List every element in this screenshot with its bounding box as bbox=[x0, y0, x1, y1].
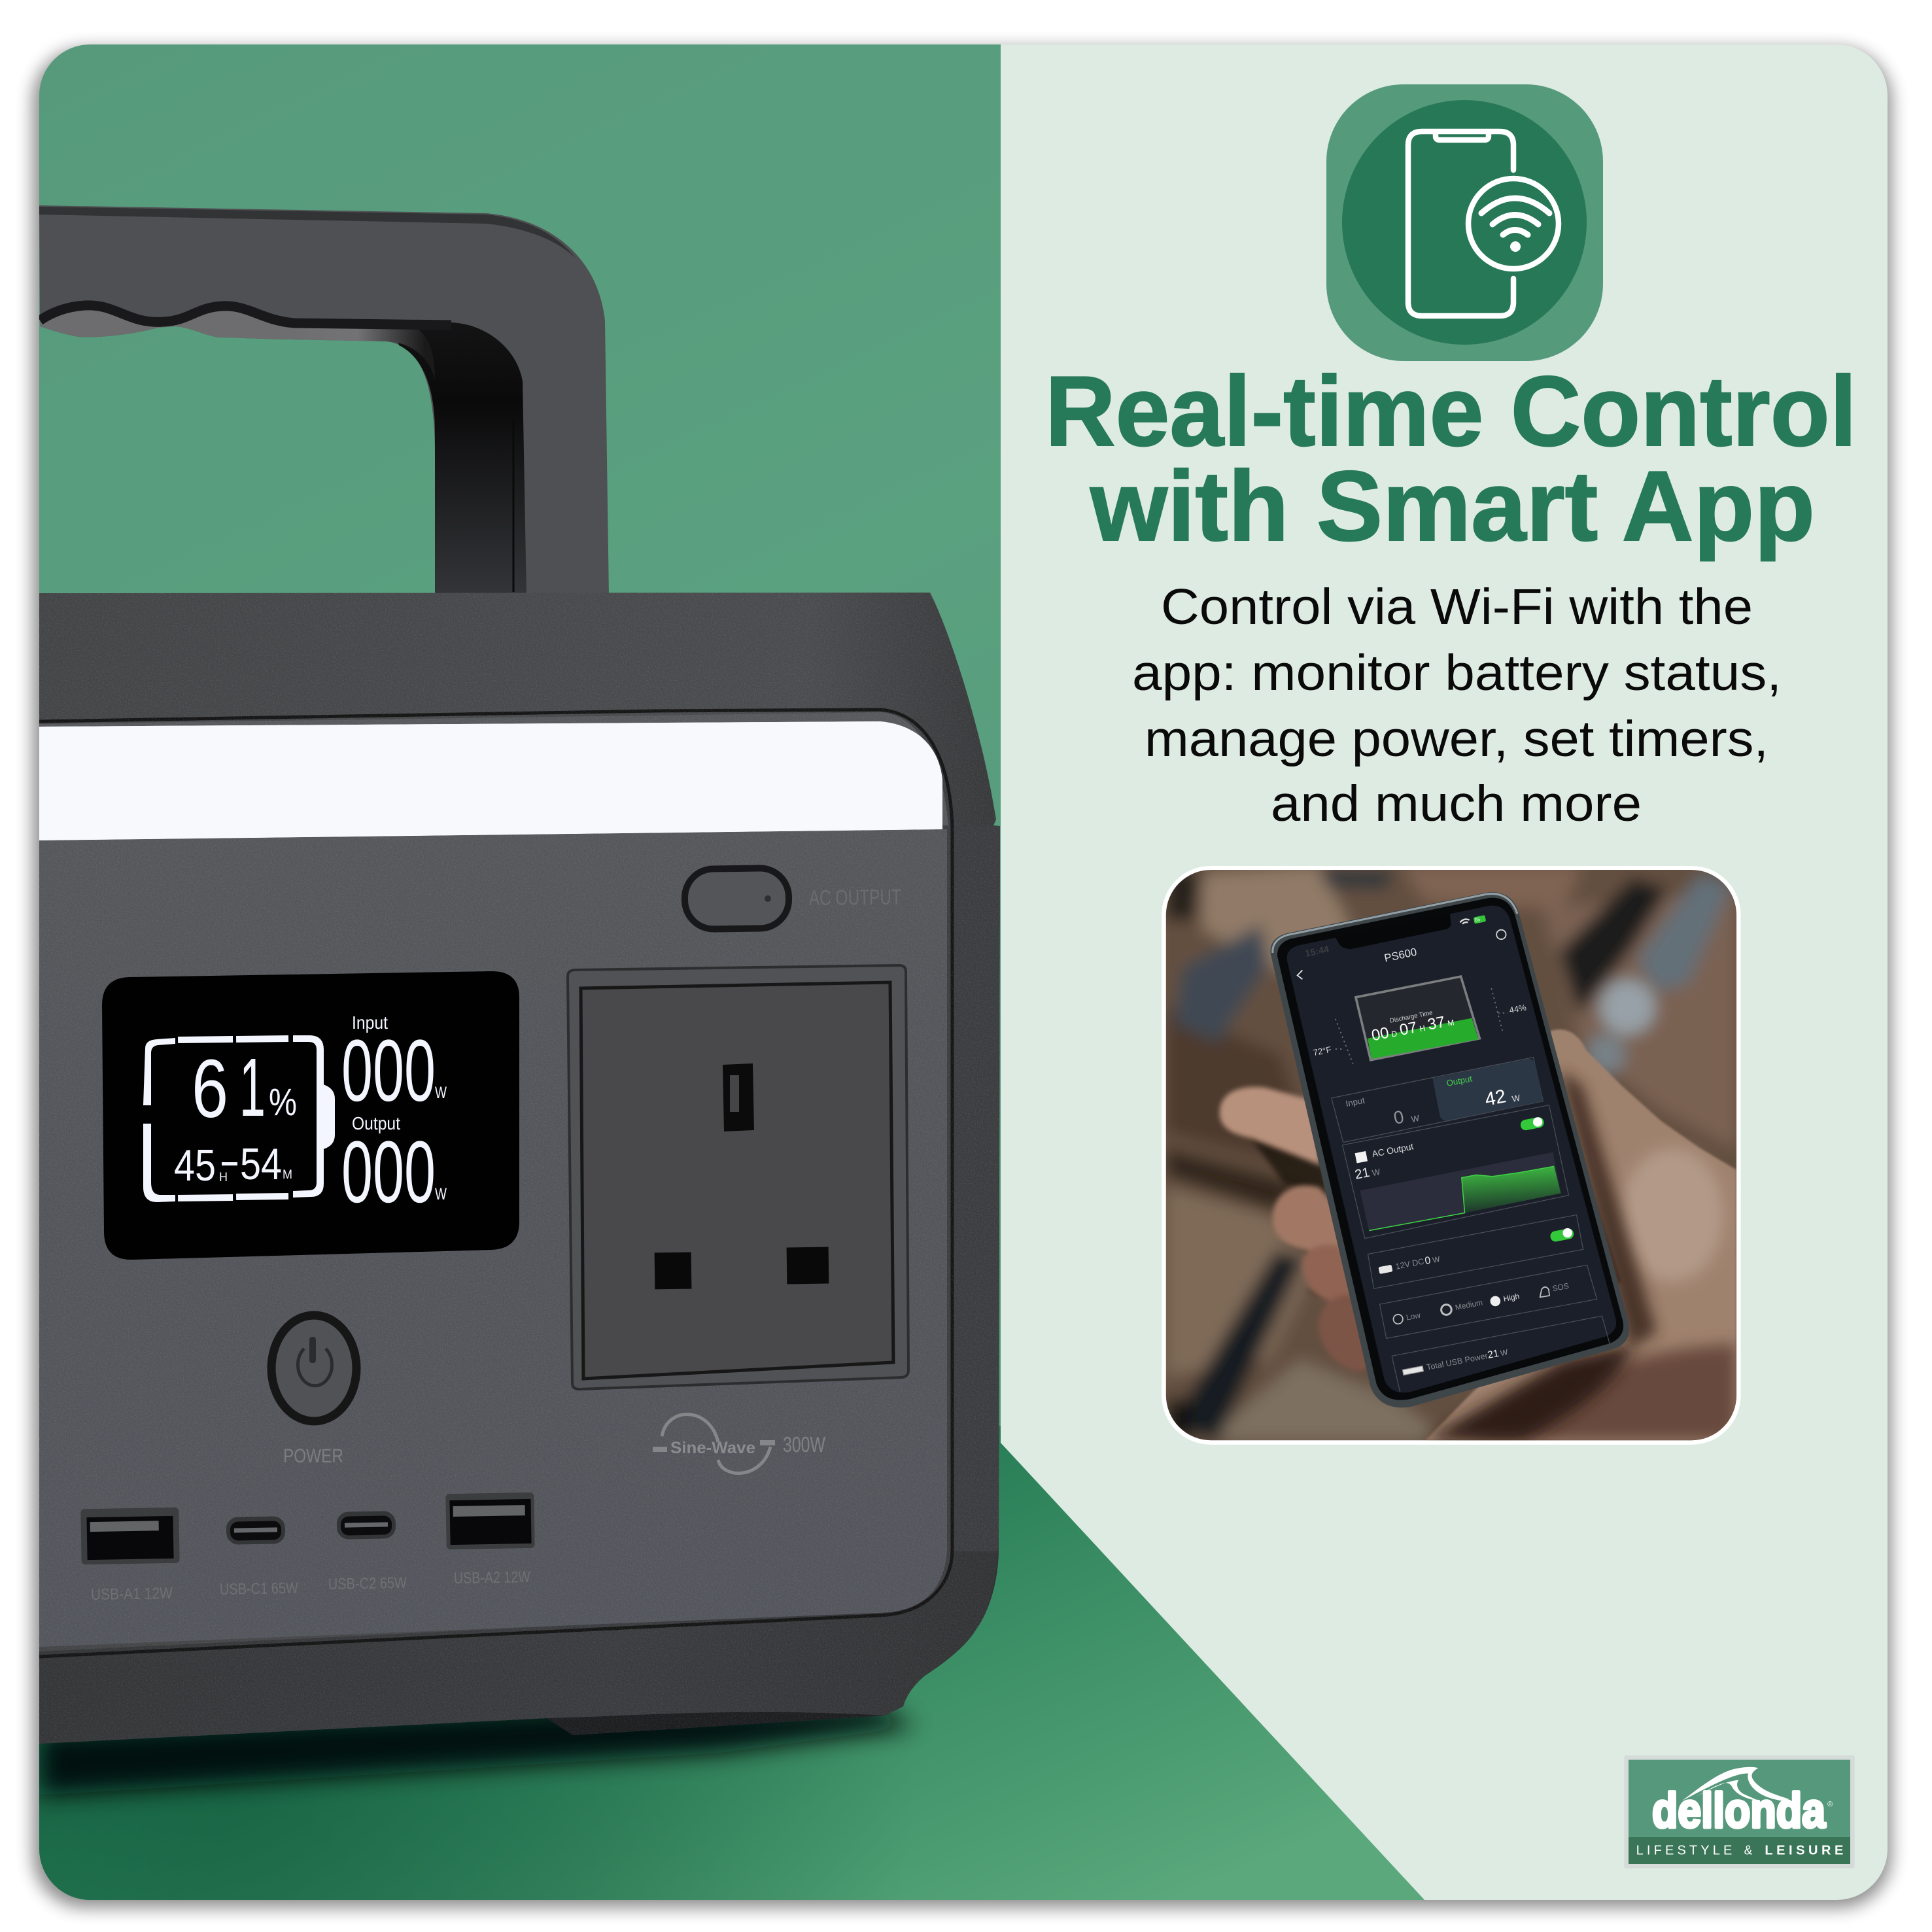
port opening bbox=[341, 1515, 392, 1536]
charge label: 44% bbox=[1508, 1003, 1527, 1015]
USB-C1 port bbox=[220, 1516, 298, 1598]
top lid seam bbox=[39, 710, 952, 1657]
panel: right light background bbox=[1001, 44, 1893, 1901]
status bar bbox=[1304, 915, 1506, 959]
chart area bbox=[1462, 1166, 1561, 1213]
front control panel bbox=[39, 829, 947, 1647]
LCD display bbox=[102, 971, 519, 1260]
panel outline bbox=[1368, 1215, 1583, 1288]
phone edge shadow on hand bbox=[1559, 1070, 1657, 1348]
body text: Control via Wi-Fi with the bbox=[1161, 579, 1753, 635]
logo tagline: LIFESTYLE bbox=[1636, 1844, 1732, 1858]
high bulb bbox=[1491, 1296, 1500, 1306]
port bezel bbox=[445, 1492, 535, 1549]
USB value: 21W bbox=[1487, 1346, 1509, 1361]
USB-C1 label: USB-C1 65W bbox=[220, 1579, 298, 1598]
input readout: W bbox=[435, 1084, 447, 1102]
AC output button bbox=[684, 868, 901, 929]
panel outline bbox=[1343, 1105, 1568, 1238]
logo background bbox=[1629, 1760, 1850, 1837]
USB panel bbox=[1392, 1316, 1610, 1392]
DC panel bbox=[1368, 1215, 1583, 1288]
medium bulb bbox=[1441, 1305, 1451, 1315]
input readout bbox=[341, 1012, 447, 1120]
upper green background bbox=[39, 44, 1002, 1549]
socket bezel bbox=[568, 965, 908, 1389]
toggle bbox=[1520, 1116, 1545, 1131]
output highlight bbox=[1432, 1059, 1543, 1121]
photo content bbox=[1151, 850, 1766, 1465]
medium label: Medium bbox=[1455, 1298, 1483, 1312]
app photo bbox=[1162, 866, 1741, 1445]
socket face bbox=[581, 982, 893, 1379]
body text: app: monitor battery status, bbox=[1132, 645, 1782, 701]
input label: Input bbox=[1345, 1095, 1366, 1109]
settings gear bbox=[1496, 930, 1506, 939]
AC output panel bbox=[1343, 1105, 1568, 1238]
icon rounded square bbox=[1326, 84, 1603, 361]
USB label: Total USB Power bbox=[1426, 1351, 1489, 1372]
discharge time: 00D07H37M bbox=[1370, 1011, 1455, 1044]
logo tagline bbox=[1636, 1844, 1843, 1858]
output readout: 000 bbox=[341, 1124, 436, 1221]
battery pill bbox=[1474, 915, 1486, 924]
heading: with Smart App bbox=[1090, 451, 1815, 562]
device body bbox=[39, 593, 1000, 1744]
temperature label: 72°F bbox=[1312, 1044, 1332, 1058]
indicator dot bbox=[765, 895, 771, 902]
SOS label: SOS bbox=[1551, 1281, 1570, 1293]
300W label: 300W bbox=[783, 1432, 826, 1457]
palm highlight bbox=[1621, 1148, 1723, 1281]
USB-A1 port bbox=[80, 1508, 180, 1604]
output value: 42 bbox=[1483, 1086, 1508, 1111]
low label: Low bbox=[1406, 1311, 1421, 1322]
toggle knob bbox=[1533, 1117, 1542, 1127]
palm and thumb bbox=[1426, 1029, 1736, 1440]
logo wordmark: dellonda bbox=[1652, 1783, 1826, 1838]
car icon bbox=[1378, 1265, 1393, 1274]
logo strip bbox=[1629, 1837, 1850, 1864]
temperature scale bbox=[1336, 1019, 1353, 1064]
handle grip underside bbox=[40, 305, 435, 379]
toggle knob bbox=[1562, 1228, 1572, 1237]
side strip bbox=[952, 826, 1000, 1551]
wave dashes bbox=[653, 1443, 775, 1449]
left fingers bbox=[1220, 1087, 1383, 1371]
live pin slot bbox=[655, 1252, 691, 1289]
clock: 15:44 bbox=[1304, 944, 1330, 959]
remaining time: H bbox=[219, 1171, 228, 1184]
back arrow bbox=[1298, 970, 1302, 979]
logo tagline: & bbox=[1744, 1844, 1753, 1858]
screen title: PS600 bbox=[1383, 946, 1418, 965]
wifi glyph bbox=[1460, 920, 1470, 924]
battery percent bbox=[192, 1041, 297, 1135]
battery illustration bbox=[1356, 976, 1479, 1060]
icon: phone with wifi bbox=[1326, 84, 1603, 361]
channel seam bbox=[513, 419, 514, 592]
battery percent: % bbox=[269, 1081, 297, 1124]
panel outline bbox=[1392, 1316, 1610, 1392]
USB icon bbox=[1402, 1366, 1424, 1375]
discharge label: Discharge Time bbox=[1389, 1009, 1434, 1025]
remaining time bbox=[174, 1139, 292, 1190]
wifi dot bbox=[1510, 241, 1521, 252]
remaining time: 45 bbox=[174, 1141, 216, 1190]
phone outline bbox=[1408, 131, 1513, 316]
button ring bbox=[271, 1315, 356, 1421]
port tongue bbox=[234, 1527, 277, 1533]
toggle bbox=[1549, 1228, 1575, 1243]
AC socket bbox=[568, 965, 908, 1389]
output readout: W bbox=[435, 1185, 447, 1203]
DC value: 0W bbox=[1424, 1253, 1441, 1267]
device outline bbox=[1356, 976, 1479, 1060]
input outline bbox=[1332, 1058, 1543, 1143]
handle body bbox=[39, 205, 609, 596]
sine-wave mark bbox=[653, 1415, 826, 1473]
USB-C2 label: USB-C2 65W bbox=[328, 1574, 407, 1593]
panel outline bbox=[1380, 1265, 1597, 1338]
phone rim highlight bbox=[1273, 894, 1517, 953]
wave arcs bbox=[662, 1415, 770, 1473]
handle grip wave bbox=[40, 305, 451, 325]
port tongue bbox=[90, 1521, 159, 1532]
product: power station bbox=[39, 205, 1004, 1746]
LED light strip bbox=[39, 721, 942, 840]
battery percent: 1 bbox=[239, 1041, 266, 1133]
USB-A1 label: USB-A1 12W bbox=[91, 1585, 173, 1604]
panel value: 21W bbox=[1354, 1164, 1381, 1182]
USB-C2 port bbox=[328, 1511, 407, 1593]
handle top rim bbox=[39, 207, 576, 258]
output label: Output bbox=[1445, 1074, 1473, 1088]
POWER label: POWER bbox=[283, 1445, 343, 1467]
charge level bbox=[1368, 1018, 1479, 1059]
phone screen bbox=[1286, 906, 1616, 1392]
finger gap shadows bbox=[1253, 1141, 1355, 1309]
palm shading bbox=[1426, 1344, 1633, 1440]
phone notch bbox=[1336, 913, 1451, 949]
input value: 0 bbox=[1392, 1107, 1406, 1128]
input readout: 000 bbox=[341, 1022, 436, 1120]
port opening bbox=[230, 1521, 281, 1541]
DC label: 12V DC bbox=[1395, 1257, 1424, 1271]
chart line bbox=[1369, 1166, 1554, 1231]
wifi circle bbox=[1468, 179, 1559, 269]
port outline bbox=[226, 1516, 285, 1545]
output readout bbox=[341, 1113, 447, 1221]
body texture bbox=[39, 589, 1004, 1746]
device lower bumper bbox=[39, 1551, 999, 1744]
heading: Real-time Control bbox=[1045, 356, 1857, 467]
port opening bbox=[449, 1499, 532, 1545]
device foot bbox=[547, 1712, 885, 1735]
wifi arcs bbox=[1481, 198, 1549, 235]
lower dark tint bbox=[39, 1758, 787, 1900]
palm lower shade bbox=[1465, 1344, 1736, 1440]
light panel bbox=[1380, 1265, 1597, 1338]
battery percent: 6 bbox=[192, 1043, 228, 1135]
lid band bbox=[39, 712, 948, 844]
logo wave bbox=[1682, 1767, 1789, 1801]
USB-A2 port bbox=[445, 1492, 535, 1587]
device ground shadow bbox=[39, 1707, 916, 1795]
display screen bbox=[102, 971, 519, 1260]
input unit: W bbox=[1410, 1113, 1421, 1124]
USB-A2 label: USB-A2 12W bbox=[454, 1568, 530, 1587]
low bulb bbox=[1393, 1315, 1403, 1324]
button ring bbox=[684, 868, 789, 929]
high label: High bbox=[1502, 1292, 1520, 1303]
lower gradient green background bbox=[39, 1426, 1478, 1903]
handle inner channel bbox=[392, 320, 526, 596]
port bezel bbox=[80, 1508, 180, 1564]
port outline bbox=[337, 1511, 396, 1540]
earth pin slot bbox=[723, 1063, 754, 1131]
logo bbox=[1625, 1755, 1855, 1868]
sine-wave label: Sine-Wave bbox=[670, 1439, 755, 1457]
port opening bbox=[86, 1516, 174, 1560]
panel title: AC Output bbox=[1371, 1141, 1415, 1159]
blurred wood background bbox=[1151, 850, 1766, 1465]
remaining time: 54 bbox=[240, 1139, 282, 1189]
output readout: Output bbox=[352, 1113, 400, 1133]
battery outline segments bbox=[143, 1035, 335, 1202]
AC OUTPUT label: AC OUTPUT bbox=[809, 885, 901, 910]
body text: manage power, set timers, bbox=[1145, 711, 1768, 767]
port tongue bbox=[453, 1505, 525, 1517]
charge scale bbox=[1491, 988, 1508, 1034]
logo border bbox=[1624, 1755, 1855, 1869]
battery terminal bbox=[323, 1084, 335, 1149]
chart grid area bbox=[1360, 1152, 1561, 1232]
output unit: W bbox=[1511, 1093, 1521, 1104]
icon circle bbox=[1342, 100, 1587, 345]
input readout: Input bbox=[352, 1012, 388, 1033]
power button bbox=[271, 1315, 356, 1467]
phone body bbox=[1271, 892, 1629, 1407]
SOS icon bbox=[1540, 1287, 1549, 1297]
logo tagline: LEISURE bbox=[1765, 1844, 1843, 1858]
input panel bbox=[1332, 1058, 1543, 1143]
LED light strip highlight bbox=[39, 721, 942, 840]
body text bbox=[1132, 579, 1782, 832]
neutral pin slot bbox=[787, 1247, 829, 1284]
body text: and much more bbox=[1271, 776, 1642, 832]
remaining time: M bbox=[283, 1168, 292, 1182]
phone bezel bbox=[1277, 898, 1623, 1400]
power symbol bbox=[298, 1349, 332, 1386]
battery percent text: 65 bbox=[1474, 916, 1481, 923]
photo frame bbox=[1162, 866, 1741, 1445]
port tongue bbox=[345, 1522, 388, 1528]
socket icon bbox=[1355, 1151, 1368, 1164]
handle bbox=[39, 205, 609, 596]
heading bbox=[1045, 356, 1857, 562]
phone outer rim bbox=[1271, 892, 1629, 1407]
registered mark: ® bbox=[1827, 1801, 1833, 1808]
